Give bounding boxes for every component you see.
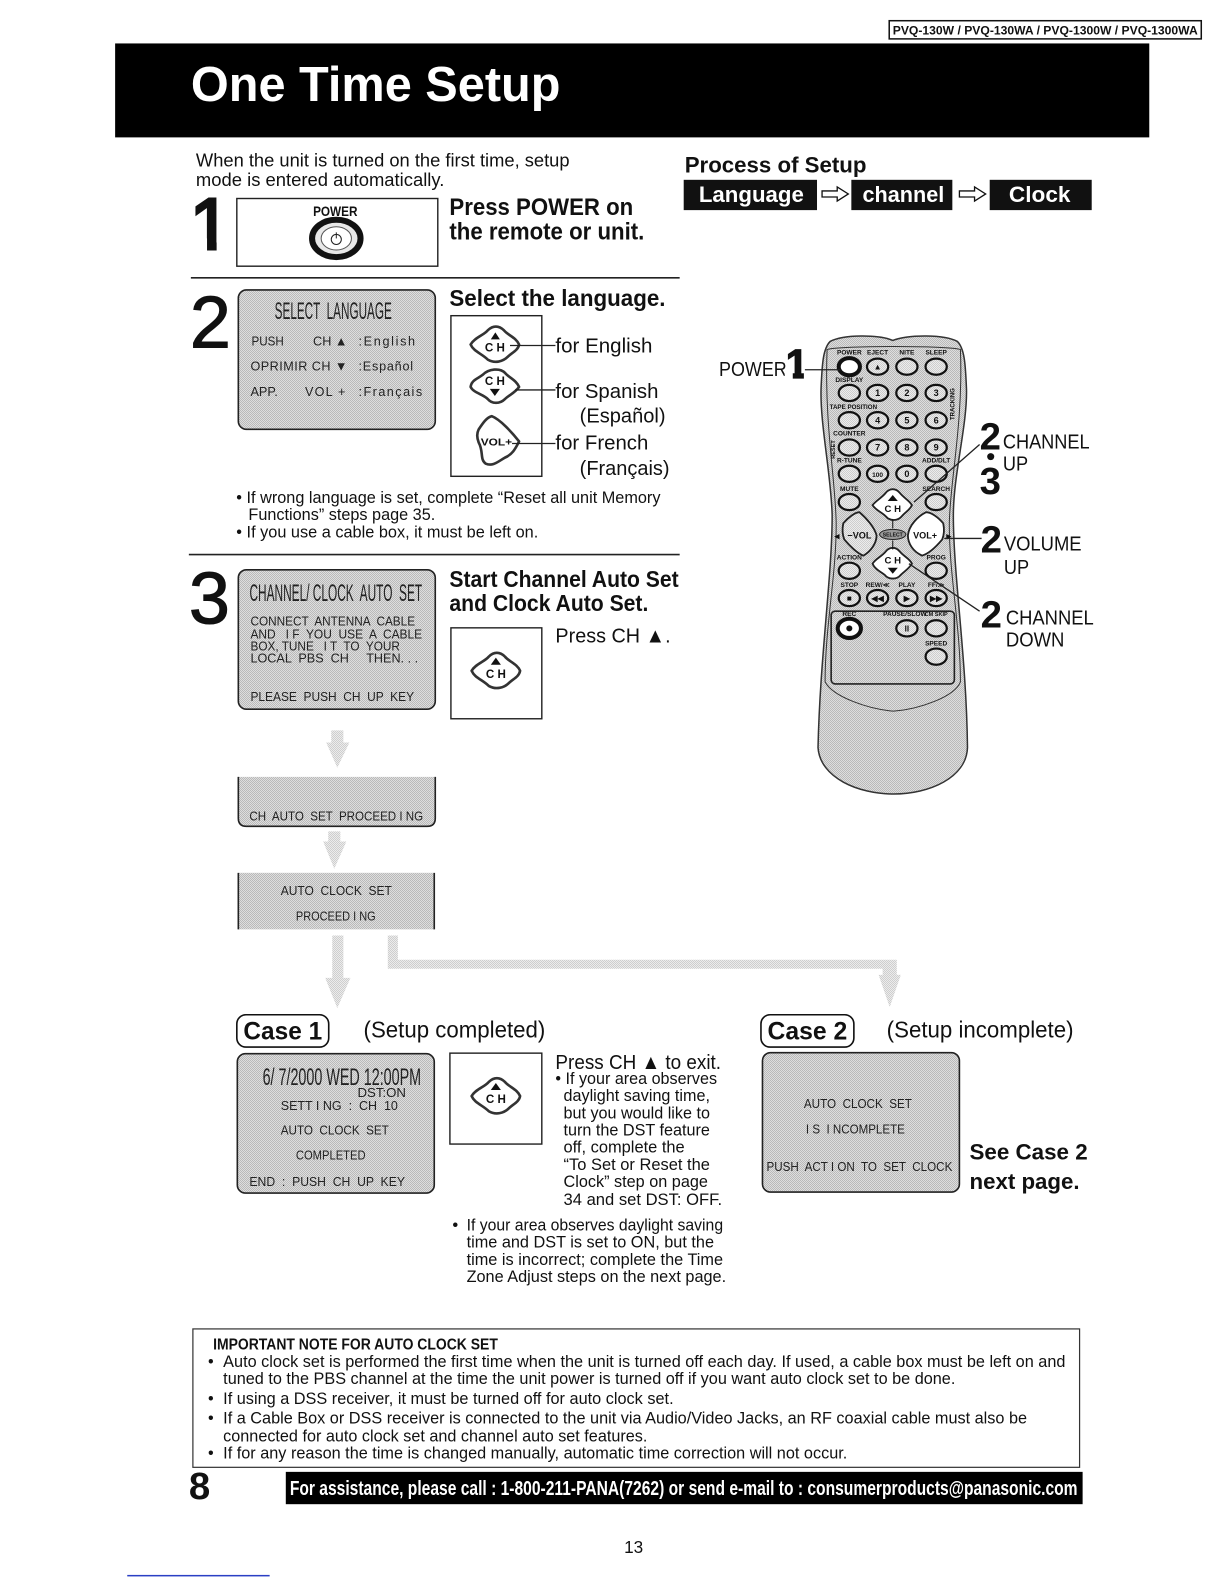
remote button labels: R-TUNE (837, 458, 862, 465)
remote callouts: UP (1004, 556, 1029, 579)
remote button labels: TAPE POSITION (830, 404, 877, 411)
remote button labels (830, 350, 956, 648)
select language screen: CH ▲ (313, 334, 347, 348)
important note box: If for any reason the time is changed manually, automatic time correction will not occur. (223, 1445, 847, 1463)
remote callouts: 2 (981, 593, 1002, 636)
important note box: connected for auto clock set and channel auto set features. (223, 1428, 647, 1446)
remote button labels: II (905, 624, 909, 633)
title banner: One Time Setup (191, 57, 560, 112)
step 1: Press POWER on (449, 195, 633, 221)
step 1: POWER (313, 203, 358, 219)
important note box: • (208, 1445, 214, 1463)
remote button labels: REC (842, 611, 857, 618)
select language screen: :Français (359, 385, 422, 399)
remote button labels: SEARCH (922, 486, 950, 493)
select language screen: APP. (250, 385, 278, 399)
dst notes: Zone Adjust steps on the next page. (467, 1267, 726, 1286)
dst notes: but you would like to (564, 1103, 710, 1122)
remote button labels: FF/≫ (928, 582, 945, 589)
remote button labels: ▶ (903, 594, 911, 603)
remote navigation pad: ◀ (834, 533, 840, 540)
auto clock proceeding screen: AUTO CLOCK SET (281, 884, 392, 898)
language notes: • If you use a cable box, it must be left on. (236, 522, 538, 541)
flow arrow to case 2 (388, 935, 901, 1007)
step 3: and Clock Auto Set. (449, 590, 648, 616)
remote button labels: ▲ (874, 363, 882, 372)
remote button labels: 4 (875, 415, 880, 425)
channel clock auto set screen: CONNECT ANTENNA CABLE (250, 614, 415, 628)
dst notes: “To Set or Reset the (564, 1155, 710, 1174)
language notes: • If wrong language is set, complete “Reset all unit Memory (236, 488, 661, 507)
step 2: for English (555, 335, 652, 358)
step 3: Start Channel Auto Set (449, 566, 679, 592)
case 1: Press CH ▲ to exit. (555, 1051, 721, 1074)
case 2: next page. (970, 1169, 1080, 1194)
setup completed screen: DST:ON (358, 1086, 406, 1100)
remote button labels: 1 (875, 388, 880, 398)
select language screen: OPRIMIR CH ▼ (250, 360, 347, 374)
step 2: 2 (190, 281, 231, 364)
remote callouts: UP (1003, 453, 1028, 476)
step 2: for French (555, 432, 648, 455)
remote callouts: DOWN (1006, 629, 1064, 652)
remote button labels: ADD/DLT (922, 458, 950, 465)
case 2 (761, 1015, 1088, 1194)
flow arrow (326, 730, 349, 768)
important note box: • (208, 1353, 214, 1371)
step 1 (188, 183, 644, 266)
select language screen: VOL + (305, 385, 345, 399)
channel clock auto set screen: CHANNEL/ CLOCK AUTO SET (249, 580, 422, 607)
remote navigation pad: −VOL (847, 530, 872, 540)
remote button labels: ▶▶ (929, 594, 943, 603)
remote button labels: 9 (934, 443, 939, 453)
remote button labels: SLEEP (925, 350, 948, 357)
channel clock auto set screen: BOX, TUNE I T TO YOUR (250, 640, 400, 654)
remote button rows (838, 358, 947, 665)
remote navigation pad: VOL+ (913, 530, 937, 540)
remote callouts: 2 (980, 416, 1001, 459)
remote button labels: ACTION (837, 555, 862, 562)
remote callouts: 2 (981, 519, 1002, 562)
dst notes: time is incorrect; complete the Time (467, 1250, 723, 1269)
remote navigation pad: SELECT (883, 532, 904, 538)
select language screen (238, 290, 435, 429)
select language screen: :Español (359, 360, 413, 374)
step 1: 1 (190, 183, 231, 266)
important note box: • (208, 1390, 214, 1408)
step 1: the remote or unit. (449, 219, 644, 245)
page number: 8 (189, 1465, 210, 1508)
dst notes (452, 1069, 726, 1286)
remote callouts: CHANNEL (1006, 606, 1094, 629)
process of setup: Clock (1009, 182, 1071, 207)
channel up button: C H (486, 668, 506, 681)
case 2: Case 2 (768, 1017, 847, 1046)
setup completed screen: AUTO CLOCK SET (281, 1123, 389, 1137)
case 2: (Setup incomplete) (887, 1016, 1074, 1042)
remote button labels: REW/≪ (866, 582, 890, 589)
remote button labels: 8 (904, 443, 909, 453)
setup incomplete screen: PUSH ACT I ON TO SET CLOCK (767, 1160, 953, 1174)
case 2: See Case 2 (970, 1140, 1088, 1165)
important note box (193, 1329, 1080, 1467)
remote button labels: 100 (872, 472, 883, 479)
remote button labels: ◀◀ (870, 594, 885, 603)
process of setup: Language (699, 182, 804, 207)
step 2 (190, 281, 670, 541)
intro text: mode is entered automatically. (196, 169, 444, 190)
process of setup: Process of Setup (685, 153, 866, 178)
channel up button: C H (486, 1093, 506, 1106)
language buttons: C H (485, 342, 505, 355)
remote callouts: CHANNEL (1003, 431, 1090, 454)
language notes: Functions” steps page 35. (248, 505, 435, 524)
channel up button (450, 1053, 542, 1144)
remote button labels: 3 (934, 388, 939, 398)
dst notes: Clock” step on page (564, 1172, 708, 1191)
remote callouts: VOLUME (1004, 533, 1082, 556)
channel clock auto set screen (238, 570, 435, 709)
select language screen: SELECT LANGUAGE (275, 298, 392, 325)
setup incomplete screen (762, 1053, 959, 1192)
remote button labels: ■ (847, 594, 852, 603)
remote button labels: PROG (927, 555, 946, 562)
case 1 (237, 1015, 726, 1286)
remote navigation pad: C H (885, 504, 901, 515)
step 3: 3 (189, 556, 230, 639)
channel clock auto set screen: AND I F YOU USE A CABLE (250, 627, 422, 641)
auto clock proceeding screen: PROCEED I NG (296, 909, 376, 923)
assistance bar (286, 1472, 1083, 1504)
remote button labels: COUNTER (833, 430, 866, 437)
flow arrow (323, 831, 346, 869)
case 1: Case 1 (243, 1017, 322, 1046)
case 1: (Setup completed) (364, 1016, 545, 1042)
select language screen: :English (359, 334, 415, 348)
dst notes: off, complete the (564, 1138, 685, 1157)
remote button labels: CM SKIP (925, 612, 948, 618)
remote button labels: DISPLAY (835, 377, 864, 384)
remote button labels: POWER (837, 350, 862, 357)
remote button labels: PLAY (898, 582, 916, 589)
remote button labels: PAUSE/SLOW (883, 611, 927, 618)
step 2: Select the language. (449, 285, 666, 311)
auto clock proceeding screen (238, 873, 434, 929)
title banner (115, 43, 1149, 137)
remote button labels: 2 (904, 388, 909, 398)
setup completed screen: SETT I NG : CH 10 (281, 1099, 398, 1113)
setup incomplete screen: I S I NCOMPLETE (806, 1122, 905, 1136)
language buttons: VOL+ (481, 437, 512, 449)
flow arrow to case 1 (325, 935, 350, 1008)
footer page number: 13 (624, 1537, 643, 1557)
blue rule (127, 1575, 270, 1576)
setup completed screen: COMPLETED (296, 1149, 366, 1163)
intro text (196, 150, 570, 190)
remote callouts: 1 (786, 341, 808, 387)
remote button labels: EJECT (867, 350, 888, 357)
dst notes: If your area observes daylight saving (467, 1215, 723, 1234)
remote button labels: TRACKING (950, 388, 956, 420)
process of setup (684, 153, 1092, 210)
language buttons (451, 316, 555, 476)
important note box: tuned to the PBS channel at the time the unit power is turned off if you want auto clock set to be done. (223, 1370, 955, 1388)
setup completed screen: 6/ 7/2000 WED 12:00PM (263, 1064, 421, 1091)
step 2: for Spanish (555, 380, 658, 403)
intro text: When the unit is turned on the first time, setup (196, 150, 570, 171)
important note box: IMPORTANT NOTE FOR AUTO CLOCK SET (213, 1337, 498, 1354)
step 3 (189, 556, 679, 719)
remote navigation pad: ▶ (946, 533, 952, 540)
dst notes: time and DST is set to ON, but the (467, 1233, 714, 1252)
remote button labels: 5 (904, 415, 909, 425)
step 3: Press CH ▲. (555, 624, 671, 647)
channel clock auto set screen: PLEASE PUSH CH UP KEY (250, 690, 415, 704)
remote button labels: NITE (899, 350, 915, 357)
remote button labels: 7 (875, 443, 880, 453)
remote navigation pad (834, 489, 952, 579)
important note box: If a Cable Box or DSS receiver is connected to the unit via Audio/Video Jacks, an RF coaxial cable must also be (223, 1409, 1027, 1427)
remote callouts: POWER (719, 358, 787, 381)
remote button labels: 6 (934, 415, 939, 425)
remote callouts: 3 (980, 460, 1001, 503)
setup completed screen: END : PUSH CH UP KEY (249, 1175, 406, 1189)
remote callouts (719, 341, 1094, 652)
channel auto set proceeding screen (238, 777, 435, 826)
important note box: • (208, 1409, 214, 1427)
important note box: If using a DSS receiver, it must be turned off for auto clock set. (223, 1390, 674, 1408)
remote button labels: SPEED (925, 641, 948, 648)
dst notes: turn the DST feature (564, 1120, 710, 1139)
language buttons: C H (485, 375, 505, 388)
language notes (236, 488, 661, 541)
channel up button (451, 628, 542, 719)
remote button labels: STOP (840, 582, 859, 589)
process of setup: channel (862, 182, 944, 207)
setup completed screen (237, 1054, 434, 1193)
dst notes: 34 and set DST: OFF. (564, 1190, 722, 1209)
step 2: (Español) (580, 404, 666, 427)
remote button labels: RESET (831, 440, 837, 459)
dst notes: • If your area observes (555, 1069, 717, 1088)
step 2: (Français) (580, 457, 670, 480)
remote button labels: 0 (904, 469, 909, 479)
important note box: Auto clock set is performed the first time when the unit is turned off each day. If used, a cable box must be left on and (223, 1353, 1065, 1371)
remote button labels: MUTE (840, 486, 859, 493)
dst notes: daylight saving time, (564, 1086, 710, 1105)
setup incomplete screen: AUTO CLOCK SET (804, 1097, 912, 1111)
remote leader lines (805, 370, 982, 611)
dst notes: • (452, 1215, 458, 1234)
channel auto set proceeding screen: CH AUTO SET PROCEED I NG (249, 809, 423, 823)
remote control (805, 336, 982, 794)
model number box: PVQ-130W / PVQ-130WA / PVQ-1300W / PVQ-1300WA (893, 23, 1198, 37)
channel clock auto set screen: LOCAL PBS CH THEN. . . (250, 652, 418, 666)
remote navigation pad: C H (885, 556, 901, 567)
select language screen: PUSH (251, 334, 284, 348)
